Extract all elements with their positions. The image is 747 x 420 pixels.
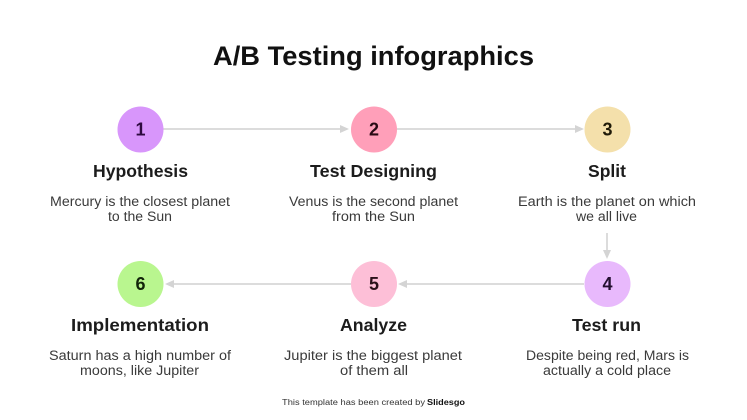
description: Venus — [289, 194, 458, 224]
number badge 5 — [351, 261, 397, 307]
arrow: step 2 to step 3 — [397, 125, 584, 133]
number badge 4 — [584, 261, 630, 307]
description: Saturn: Saturn has a high number of — [49, 348, 231, 363]
panel: step 2 Test Designing — [289, 106, 458, 224]
description: Mercury: to the Sun — [108, 209, 172, 224]
description: Mercury — [50, 194, 230, 224]
description: Mercury: Mercury is the closest planet — [50, 194, 230, 209]
footer credit: Slidesgo — [427, 398, 465, 407]
heading: Hypothesis: Hypothesis — [93, 161, 188, 181]
description: Venus: Venus is the second planet — [289, 194, 458, 209]
panel: step 3 Split — [518, 106, 696, 224]
number badge 2 — [351, 106, 397, 152]
description: Saturn: moons, like Jupiter — [80, 363, 200, 378]
footer credit — [282, 398, 465, 407]
panel: step 4 Test run — [526, 261, 689, 378]
number badge 4: 4 — [602, 274, 613, 294]
number badge 6 — [118, 261, 164, 307]
heading: Test run: Test run — [572, 315, 641, 335]
description: Mars: actually a cold place — [543, 363, 671, 378]
number badge 6: 6 — [135, 274, 146, 294]
heading: Test Designing: Test Designing — [310, 161, 437, 181]
number badge 5: 5 — [369, 274, 379, 294]
panel: step 1 Hypothesis — [50, 106, 230, 224]
description: Earth: we all live — [575, 209, 637, 224]
description: Mars — [526, 348, 689, 378]
arrow: step 5 to step 6 — [165, 280, 351, 288]
number badge 1: 1 — [135, 120, 146, 140]
number badge 2: 2 — [369, 120, 379, 140]
arrow: step 4 to step 5 — [398, 280, 584, 288]
heading: Analyze: Analyze — [340, 315, 407, 335]
description: Jupiter: Jupiter is the biggest planet — [284, 348, 462, 363]
description: Earth — [518, 194, 696, 224]
description: Earth: Earth is the planet on which — [518, 194, 696, 209]
number badge 1 — [118, 106, 164, 152]
title: A/B Testing infographics — [213, 41, 534, 71]
panel: step 5 Analyze — [284, 261, 462, 378]
heading: Split: Split — [588, 161, 626, 181]
arrow: step 3 to step 4 — [603, 233, 611, 259]
heading: Implementation: Implementation — [71, 315, 209, 335]
description: Saturn — [49, 348, 231, 378]
footer credit: This template has been created by — [282, 398, 425, 407]
number badge 3 — [584, 106, 630, 152]
panel: step 6 Implementation — [49, 261, 231, 378]
arrow: step 1 to step 2 — [163, 125, 349, 133]
description: Venus: from the Sun — [332, 209, 415, 224]
description: Jupiter: of them all — [340, 363, 408, 378]
description: Jupiter — [284, 348, 462, 378]
number badge 3: 3 — [602, 120, 613, 140]
description: Mars: Despite being red, Mars is — [526, 348, 689, 363]
